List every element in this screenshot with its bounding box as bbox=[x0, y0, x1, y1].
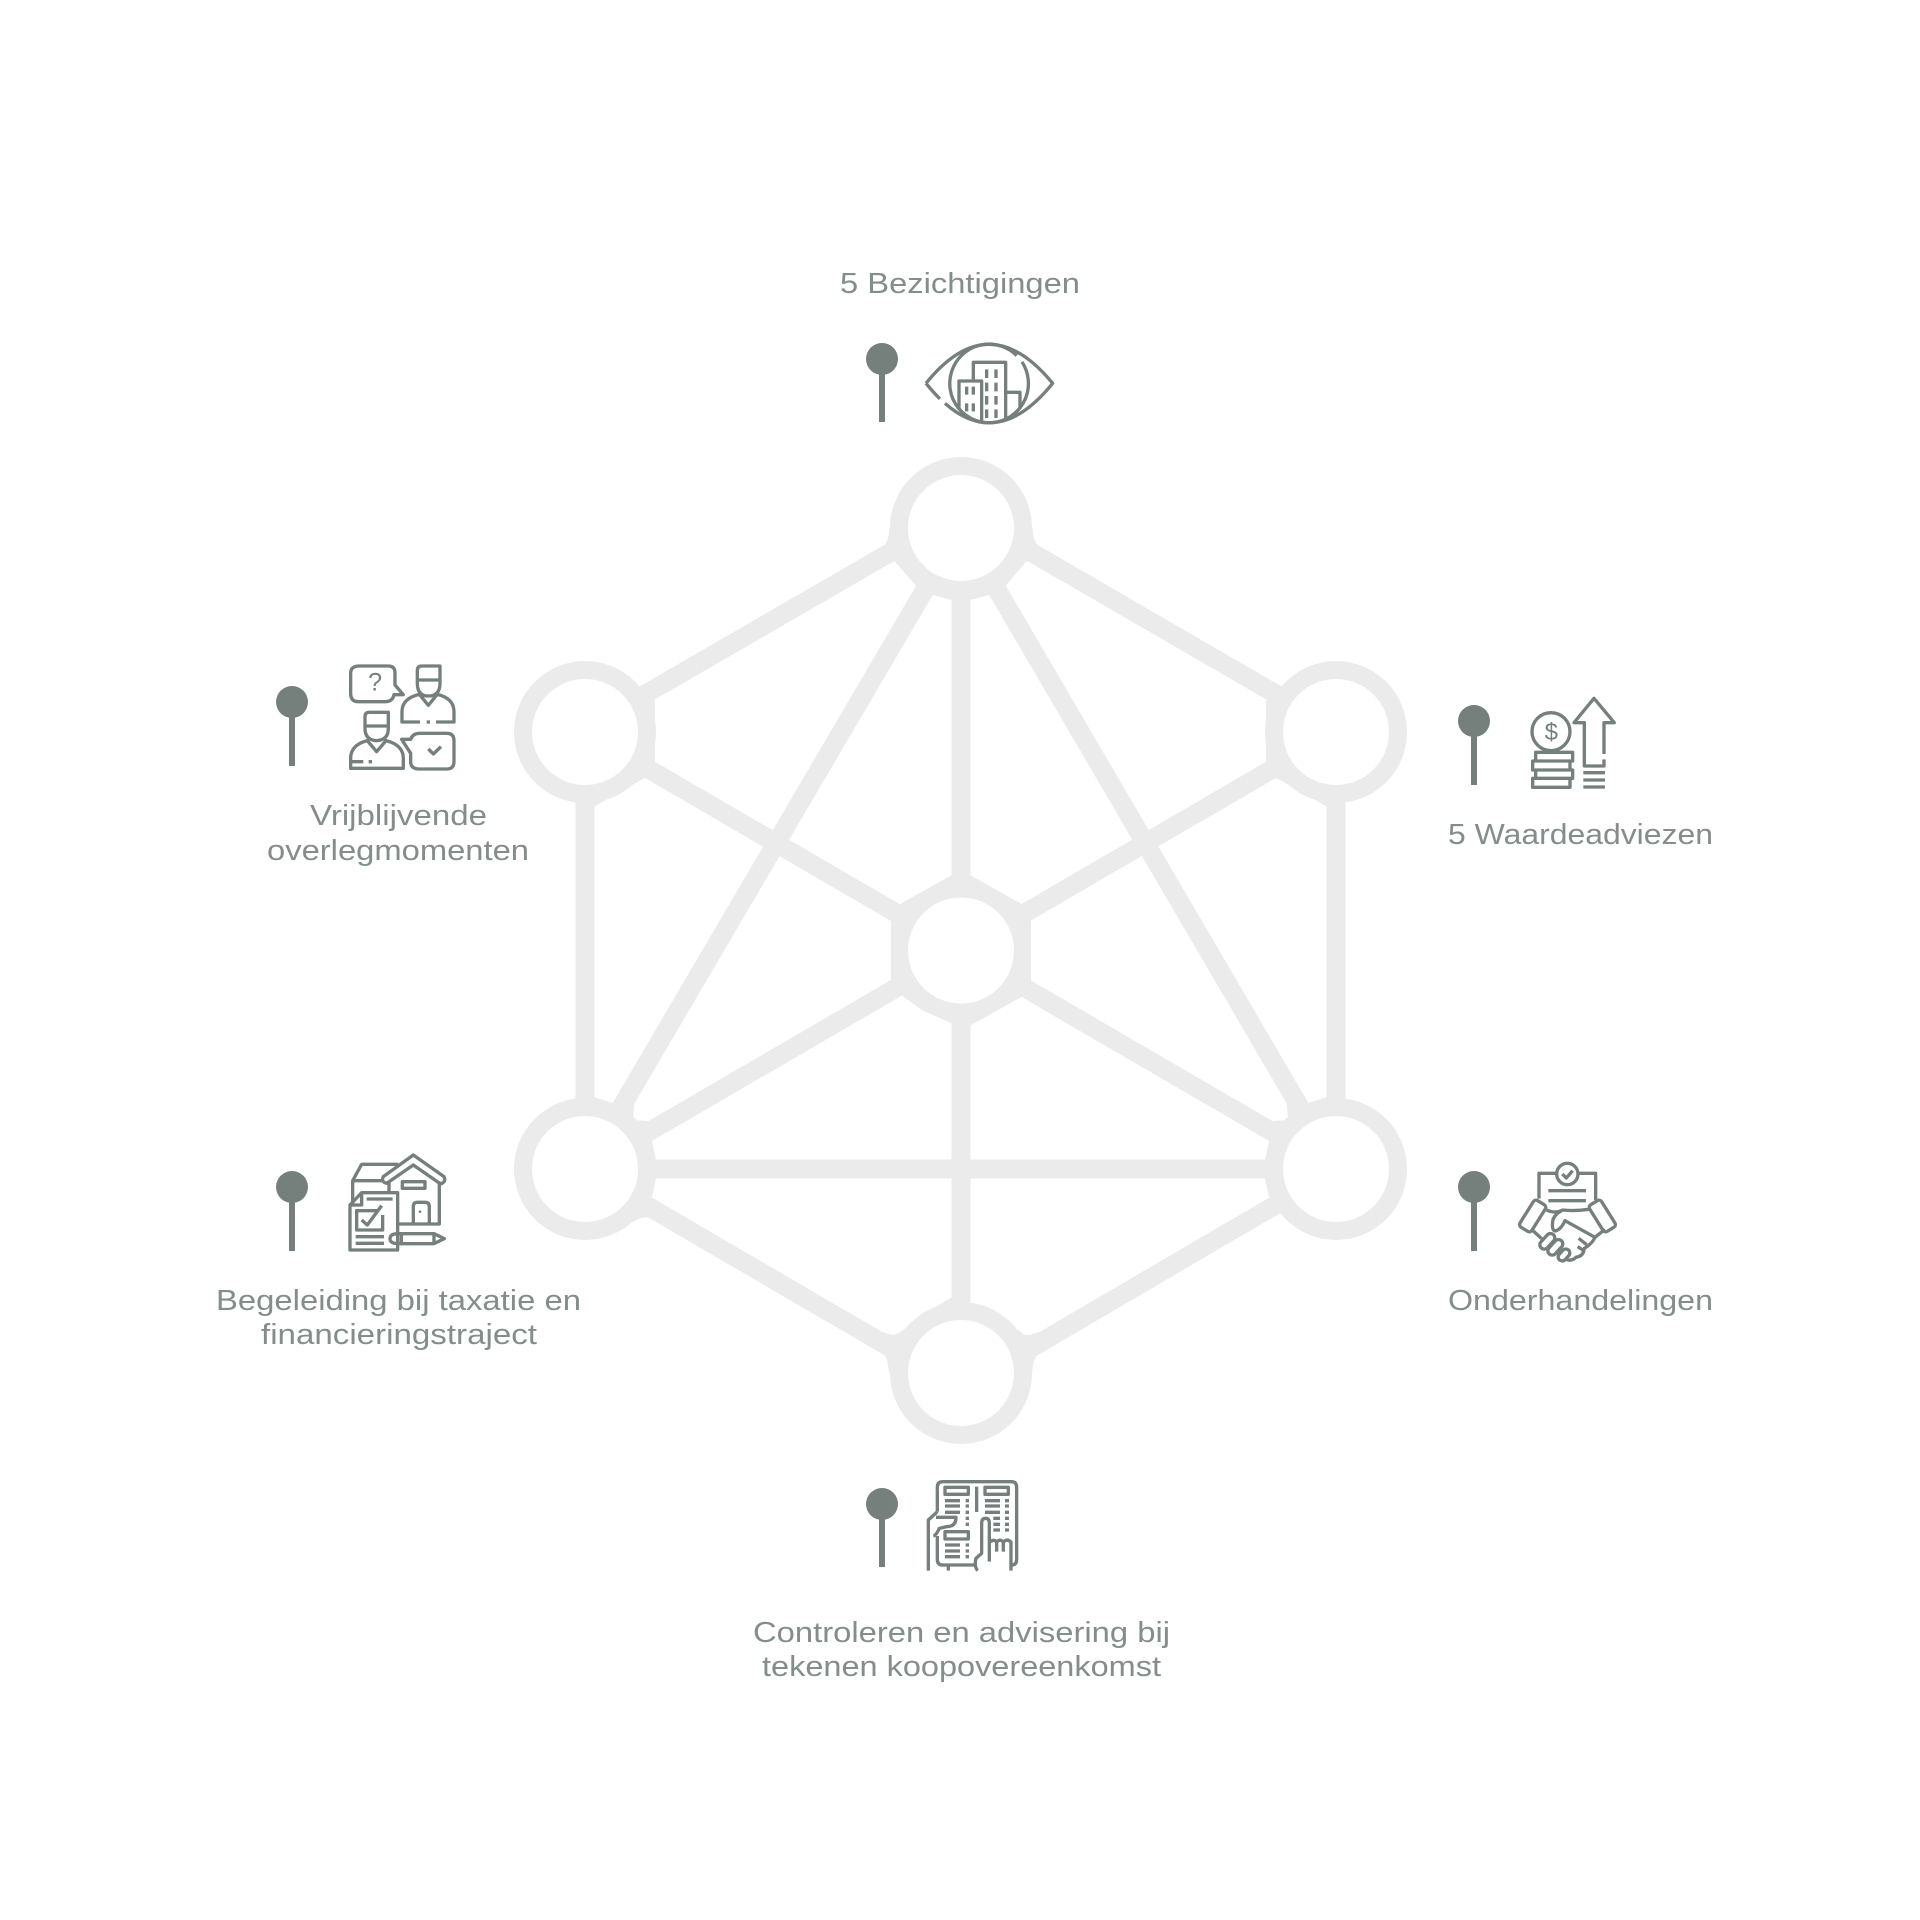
pin bbox=[276, 686, 308, 766]
node junction fills bbox=[585, 528, 1336, 1373]
item: 5 Waardeadviezen bbox=[1448, 698, 1713, 851]
item: Controleren en advisering bbox=[753, 1482, 1170, 1683]
label: Begeleiding bij taxatie en bbox=[216, 1285, 581, 1317]
node: bottom bbox=[899, 1311, 1023, 1435]
label line 2: tekenen koopovereenkomst bbox=[762, 1651, 1161, 1683]
label: 5 Bezichtigingen bbox=[840, 268, 1080, 300]
node: top left bbox=[523, 670, 647, 794]
icon: two people in conversation bbox=[351, 666, 454, 769]
label line 2: financieringstraject bbox=[261, 1319, 537, 1351]
connecting lines bbox=[585, 512, 1336, 1389]
item: Begeleiding taxatie bbox=[216, 1155, 581, 1351]
icon: handshake with contract bbox=[1518, 1163, 1617, 1263]
pin bbox=[1458, 1171, 1490, 1251]
item: 5 Bezichtigingen bbox=[840, 268, 1080, 423]
label line 2: overlegmomenten bbox=[267, 835, 529, 867]
icon: two people in conversation: ? bbox=[368, 669, 382, 697]
pin bbox=[866, 343, 898, 422]
icon: coins and rising arrow bbox=[1532, 698, 1614, 787]
label: 5 Waardeadviezen bbox=[1448, 819, 1713, 851]
node: top bbox=[899, 466, 1023, 590]
pin bbox=[1458, 705, 1490, 785]
node: center bbox=[908, 898, 1014, 1004]
pin bbox=[866, 1488, 898, 1567]
item: Onderhandelingen bbox=[1448, 1163, 1713, 1317]
label: Controleren en advisering bij bbox=[753, 1617, 1170, 1649]
node: bottom left bbox=[523, 1107, 647, 1231]
label: Onderhandelingen bbox=[1448, 1285, 1713, 1317]
network diagram bbox=[523, 466, 1398, 1435]
node: bottom right bbox=[1274, 1107, 1398, 1231]
icon: eye with buildings bbox=[926, 344, 1053, 423]
node: top right bbox=[1274, 670, 1398, 794]
icon: document with hands bbox=[928, 1482, 1017, 1571]
pin bbox=[276, 1171, 308, 1251]
label: Vrijblijvende bbox=[310, 800, 487, 832]
item: Vrijblijvende overlegmomenten bbox=[267, 666, 529, 867]
icon: houses and document bbox=[350, 1155, 445, 1250]
icon: coins and rising arrow: $ bbox=[1545, 719, 1558, 746]
